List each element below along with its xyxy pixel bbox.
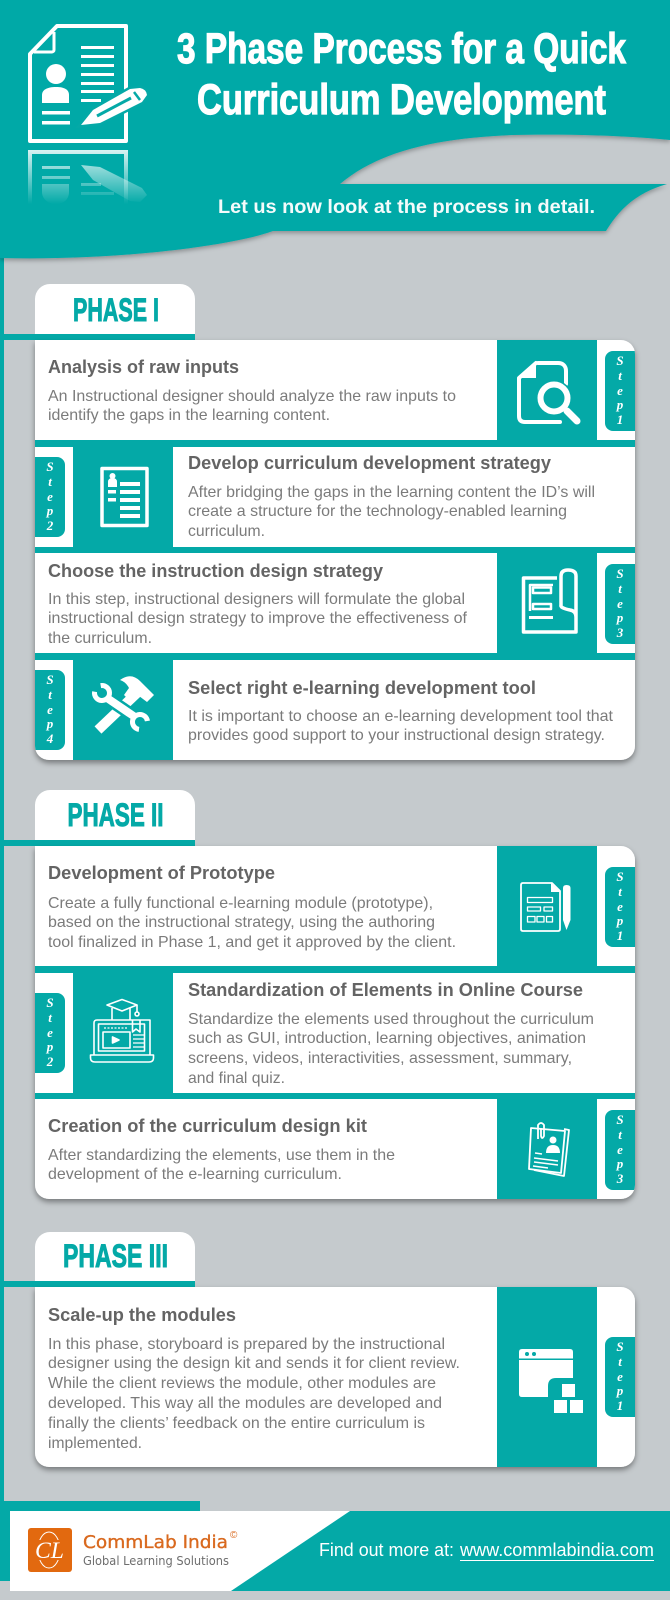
- icon: window with module blocks: [519, 1349, 583, 1413]
- icon: document reflection: [30, 152, 147, 204]
- icon: clipped resume: [529, 1123, 569, 1176]
- step 1: prototype: Create a fully functional e-learning module (prototype),: [48, 895, 433, 912]
- step 2: standardization of elements: Standardization of Elements in Online Course: [188, 980, 583, 1000]
- step 1: scale-up the modules: implemented.: [48, 1435, 142, 1452]
- logo: CommLab India: CommLab India: [83, 1532, 228, 1553]
- logo: CommLab India: Global Learning Solutions: [83, 1553, 229, 1568]
- icon: document magnifier: [517, 361, 577, 422]
- step 1: scale-up the modules: designer using the design kit and sends it for client review.: [48, 1355, 460, 1372]
- logo: CommLab India: ©: [230, 1530, 238, 1541]
- step 2: standardization of elements: Standardize the elements used throughout the curriculum: [188, 1011, 594, 1028]
- step 1: prototype: based on the instructional strategy, using the authoring: [48, 914, 435, 931]
- step 4: e-learning development tool: Select right e-learning development tool: [188, 678, 536, 698]
- step 4: e-learning development tool: [188, 678, 614, 744]
- step 1: prototype: [48, 863, 456, 951]
- phase I heading tab: PHASE I: [73, 292, 159, 328]
- phase III heading tab: [4, 1232, 195, 1287]
- step 3: instruction design strategy: instructional design strategy to improve the effectiveness of: [48, 610, 468, 627]
- step 2: curriculum development strategy: [188, 453, 595, 540]
- step 1: scale-up the modules: In this phase, storyboard is prepared by the instructional: [48, 1336, 445, 1353]
- step 4: e-learning development tool: It is important to choose an e-learning development tool that: [188, 708, 614, 725]
- phase II heading tab: [4, 790, 195, 846]
- panel structure: teal bands and columns: [15, 846, 655, 1199]
- step 1: analysis of raw inputs: Analysis of raw inputs: [48, 357, 239, 377]
- step 2: curriculum development strategy: Develop curriculum development strategy: [188, 453, 551, 473]
- panel structure: teal bands and columns: [15, 340, 655, 760]
- icon: open book document: [524, 570, 576, 632]
- phase II heading tab: PHASE II: [68, 797, 164, 833]
- step 2: standardization of elements: and final quiz.: [188, 1070, 285, 1087]
- panel: phase I steps: [15, 340, 655, 760]
- phase III heading tab: PHASE III: [63, 1238, 168, 1274]
- logo: CommLab India: [28, 1528, 238, 1572]
- panel: phase III step: [35, 1287, 655, 1467]
- footer band: [0, 1501, 670, 1591]
- step 1: prototype: tool finalized in Phase 1, and get it approved by the client.: [48, 934, 456, 951]
- panel structure: teal column and tab: [497, 1287, 635, 1467]
- step 4: e-learning development tool: provides good support to your instructional design strategy.: [188, 727, 605, 744]
- step 4 tab label: Step4: [46, 672, 54, 746]
- step 3 tab label: Step3: [616, 566, 624, 640]
- step 1: scale-up the modules: finally the clients’ feedback on the entire curriculum is: [48, 1415, 425, 1432]
- step 1 tab label: Step1: [616, 869, 624, 943]
- step 3: curriculum design kit: Creation of the curriculum design kit: [48, 1116, 367, 1136]
- step 3: instruction design strategy: In this step, instructional designers will formulate the global: [48, 591, 465, 608]
- step 3: instruction design strategy: the curriculum.: [48, 630, 152, 647]
- step 1: scale-up the modules: While the client reviews the module, other modules are: [48, 1375, 436, 1392]
- step 3: curriculum design kit: [48, 1116, 395, 1183]
- icon: laptop with graduation cap: [90, 1000, 154, 1062]
- icon: list document: [102, 468, 147, 526]
- icon: form document and pen: [521, 883, 570, 931]
- step 2: standardization of elements: such as GUI, introduction, learning objectives, animation: [188, 1030, 586, 1047]
- icon: hammer and wrench: [94, 676, 154, 730]
- step 1: scale-up the modules: [48, 1305, 460, 1452]
- step 1 tab label: Step1: [616, 353, 624, 427]
- title: [177, 25, 626, 124]
- step 1: scale-up the modules: developed. This way all the modules are developed and: [48, 1395, 442, 1412]
- step 1: scale-up the modules: Scale-up the modules: [48, 1305, 236, 1325]
- step 1: analysis of raw inputs: An Instructional designer should analyze the raw inputs to: [48, 388, 456, 405]
- panel: phase II steps: [15, 846, 655, 1199]
- subtitle: Let us now look at the process in detail.: [218, 196, 595, 218]
- find out more link: [319, 1540, 654, 1561]
- step 2: standardization of elements: screens, videos, interactivities, assessment, summary,: [188, 1050, 572, 1067]
- step 2: curriculum development strategy: After bridging the gaps in the learning content the ID’s will: [188, 484, 595, 501]
- left vertical rule: [0, 250, 4, 1501]
- logo: CommLab India: CL: [35, 1538, 64, 1563]
- step 2: curriculum development strategy: create a structure for the technology-enabled learning: [188, 503, 567, 520]
- step 3 tab label: Step3: [616, 1112, 624, 1186]
- find out more link: www.commlabindia.com: [459, 1540, 654, 1560]
- icon: document and pencil: [30, 26, 147, 141]
- step 1: analysis of raw inputs: [48, 357, 456, 424]
- header banner: [0, 0, 670, 258]
- step 3: curriculum design kit: After standardizing the elements, use them in the: [48, 1147, 395, 1164]
- step 1 tab label: Step1: [616, 1339, 624, 1413]
- step 2: standardization of elements: [188, 980, 594, 1087]
- find out more link: Find out more at:: [319, 1540, 454, 1560]
- step 3: instruction design strategy: [48, 561, 468, 647]
- step 2 tab label: Step2: [46, 995, 54, 1069]
- step 3: curriculum design kit: development of the e-learning curriculum.: [48, 1166, 342, 1183]
- step 3: instruction design strategy: Choose the instruction design strategy: [48, 561, 383, 581]
- step 1: prototype: Development of Prototype: [48, 863, 275, 883]
- phase I heading tab: [4, 284, 195, 340]
- step 2: curriculum development strategy: curriculum.: [188, 523, 265, 540]
- step 2 tab label: Step2: [46, 459, 54, 533]
- step 1: analysis of raw inputs: identify the gaps in the learning content.: [48, 407, 330, 424]
